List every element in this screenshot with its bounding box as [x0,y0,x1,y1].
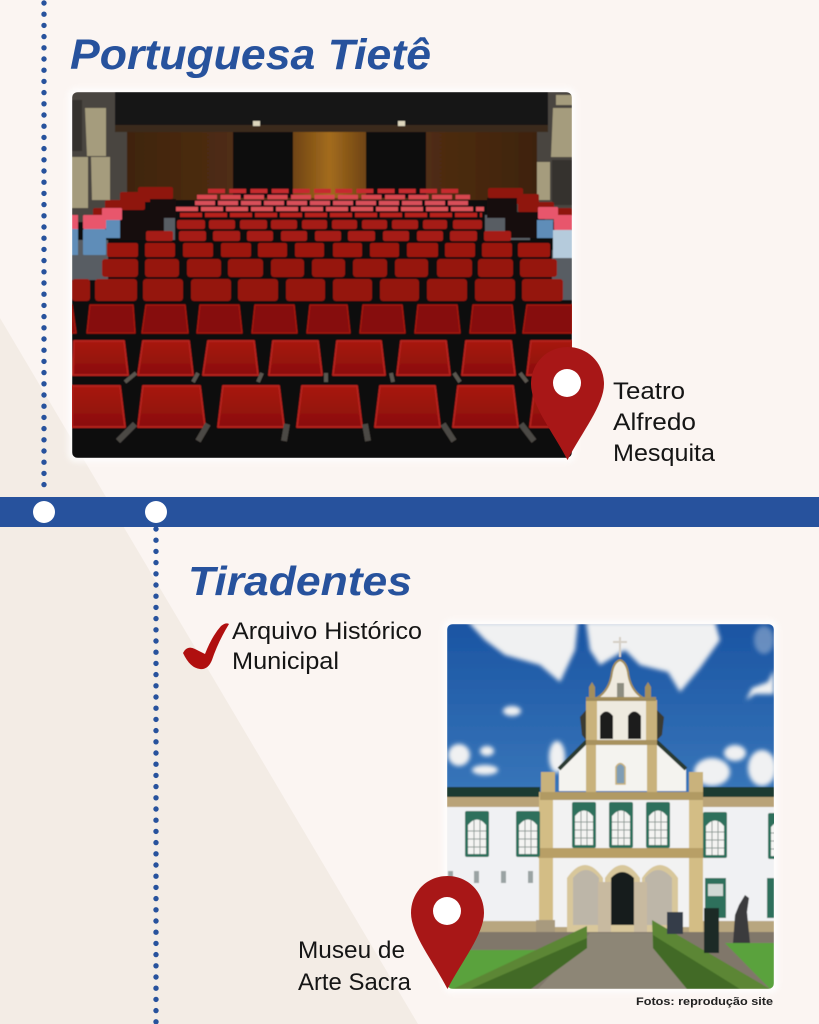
wings [447,806,774,922]
label: Arquivo Histórico Municipal: Municipal [232,648,339,675]
photo: Teatro Alfredo Mesquita auditorium [68,88,576,462]
back pink rows [176,191,484,215]
label: Museu de Arte Sacra: Museu de [298,937,405,964]
icon: map pin Museu [411,876,484,989]
label: Teatro Alfredo Mesquita: Teatro [613,378,685,405]
cross [613,637,627,657]
floor side areas [72,215,572,300]
small wing windows [448,871,533,883]
heading: Tiradentes: Tiradentes [188,558,412,604]
heading: Portuguesa Tietê: Portuguesa Tietê [70,31,431,79]
label: Museu de Arte Sacra [298,937,412,996]
arches [567,865,678,932]
diagonal background shape [0,318,418,1024]
label: Teatro Alfredo Mesquita: Mesquita [613,440,716,467]
stage back wall [127,132,537,200]
tower [596,700,647,741]
pediment [597,660,643,698]
horizontal timeline band [0,497,819,527]
windows [572,802,596,848]
icon: red check mark [183,623,229,669]
label: Arquivo Histórico Municipal: Arquivo Histórico [232,618,422,645]
side seats [93,187,572,218]
photo credit: Fotos: reprodução site [636,996,773,1008]
dotted line: bottom timeline [153,529,159,1024]
window of gable [616,764,625,784]
dotted line: top timeline [41,3,47,492]
label: Arquivo Histórico Municipal [232,618,422,675]
label: Museu de Arte Sacra: Arte Sacra [298,969,412,996]
seat rows [146,220,511,241]
label: Teatro Alfredo Mesquita: Alfredo [613,409,696,436]
gable [559,741,686,791]
lower green door [705,878,726,918]
ground [447,932,774,989]
central body [552,799,690,928]
clouds [448,622,776,786]
icon: map pin Teatro [531,347,604,460]
label: Teatro Alfredo Mesquita [613,378,716,467]
photo: Museu de Arte Sacra building [443,620,792,993]
seat arms [118,424,534,441]
ceiling [115,92,548,125]
statue and sign [733,895,750,943]
side walls [72,92,127,222]
